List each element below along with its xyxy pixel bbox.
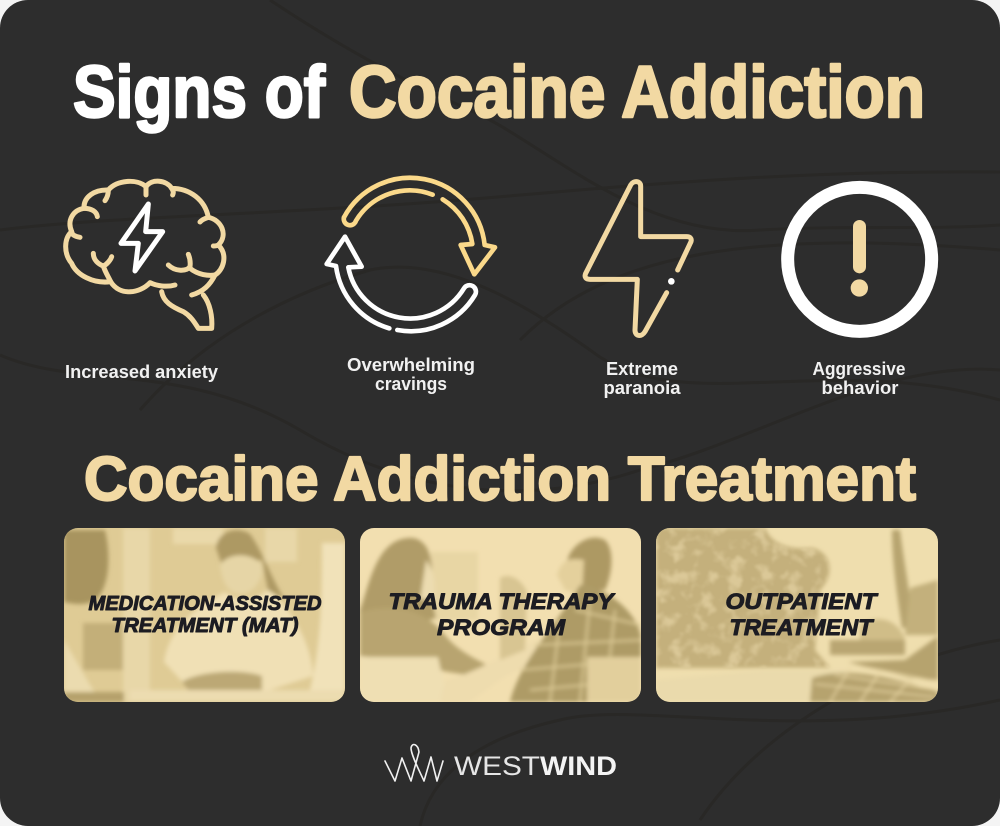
panel: trauma therapy program — [360, 528, 641, 702]
sign labels: Overwhelming — [347, 355, 475, 375]
sign labels: Aggressive — [812, 359, 906, 379]
card text — [88, 592, 322, 637]
title: Signs of — [73, 52, 326, 133]
icon: brain with lightning bolt — [66, 181, 224, 328]
panel: outpatient treatment — [656, 528, 938, 702]
card text: OUTPATIENT — [726, 589, 879, 614]
card text — [726, 589, 879, 640]
heading: treatment: Cocaine Addiction Treatment — [84, 445, 916, 514]
logo wordmark: WIND — [540, 751, 617, 781]
card text: PROGRAM — [437, 615, 566, 640]
logo wordmark: WEST — [454, 751, 540, 781]
card text: TREATMENT (MAT) — [112, 614, 299, 637]
icon: exclamation in circle — [788, 187, 932, 331]
logo wave mark — [385, 745, 443, 781]
card text: TREATMENT — [730, 615, 875, 640]
sign labels: cravings — [375, 374, 447, 394]
sign labels: Extreme — [606, 359, 678, 379]
sign labels: Increased anxiety — [65, 362, 218, 382]
icon: cycle arrows — [327, 178, 495, 331]
icon: lightning bolt — [585, 182, 691, 335]
sign labels: behavior — [822, 378, 898, 398]
logo: Westwind — [385, 745, 617, 781]
title — [73, 52, 925, 133]
sign labels: paranoia — [604, 378, 682, 398]
card text — [388, 589, 616, 640]
sign labels — [65, 355, 906, 398]
card text: TRAUMA THERAPY — [388, 589, 616, 614]
panel: medication-assisted treatment — [64, 528, 345, 702]
title: Cocaine Addiction — [349, 52, 925, 133]
card text: MEDICATION-ASSISTED — [88, 592, 322, 615]
